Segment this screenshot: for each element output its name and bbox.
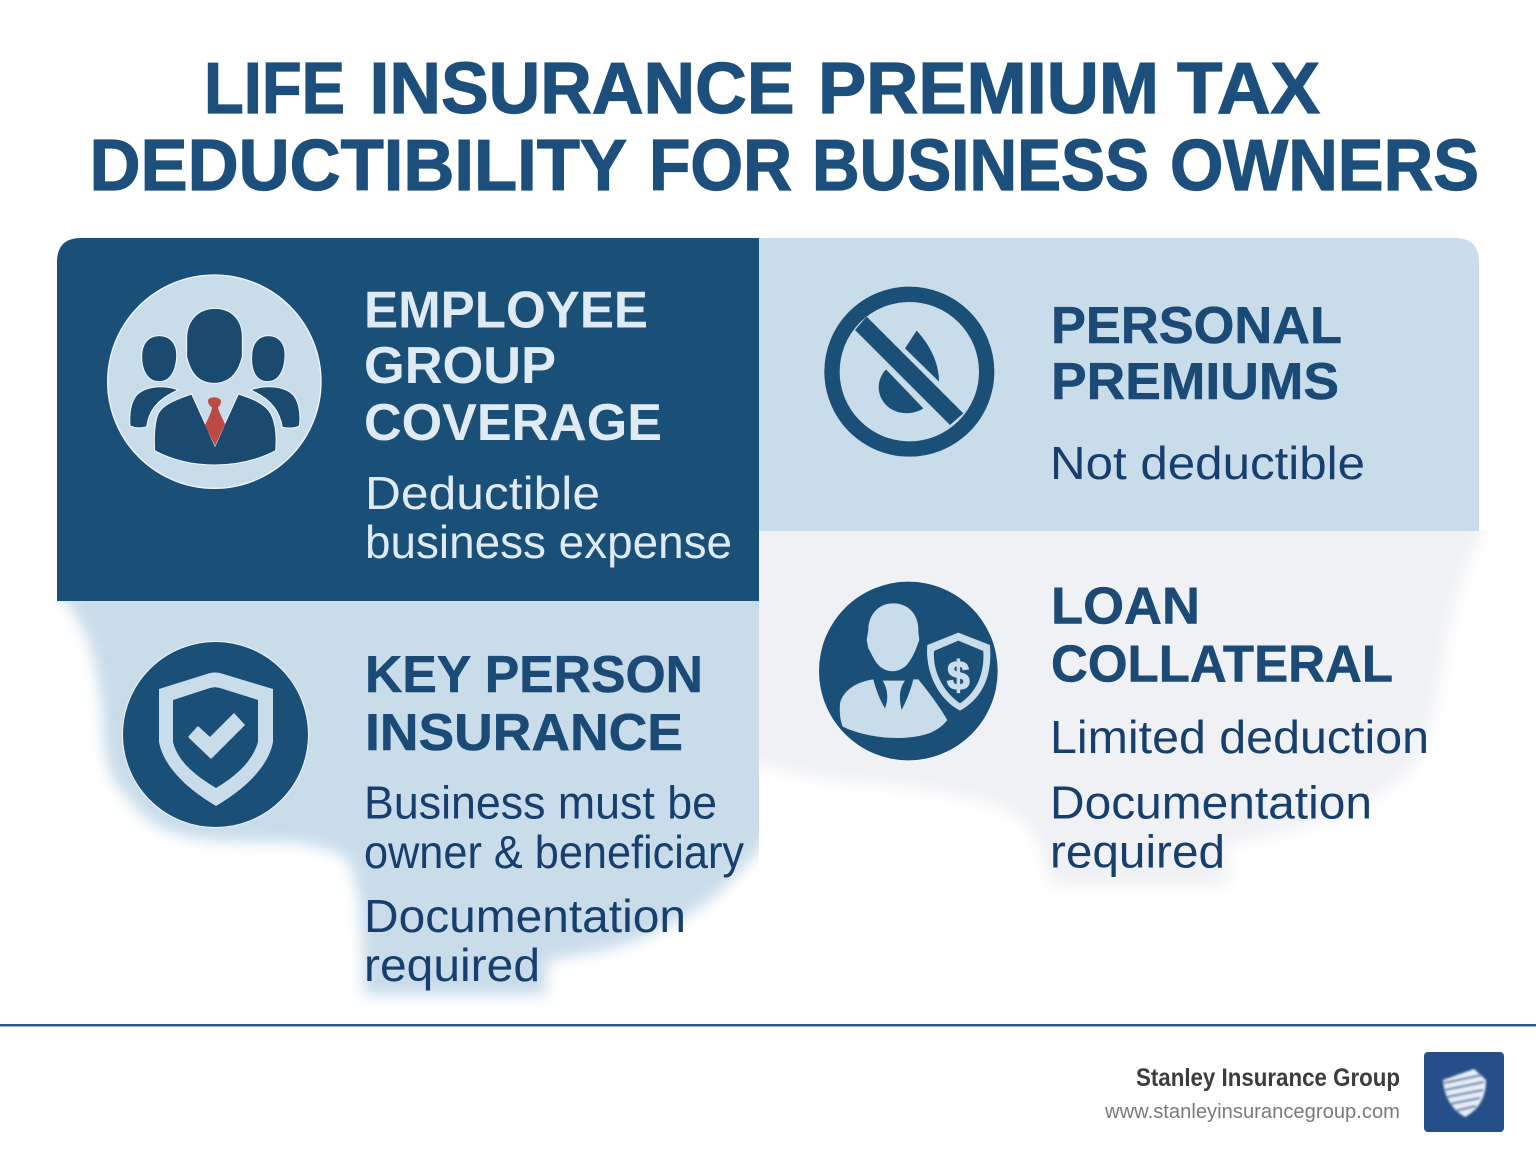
text: business must be owner and beneficiary: owner & beneficiary bbox=[364, 826, 744, 878]
heading: personal premiums bbox=[1051, 297, 1342, 411]
text: deductible business expense: business expense bbox=[365, 516, 732, 568]
heading: key person insurance: KEY PERSON bbox=[365, 646, 703, 704]
heading: employee group coverage: GROUP bbox=[364, 337, 556, 395]
text: documentation required (key person): Documentation bbox=[364, 890, 686, 942]
title bbox=[90, 49, 1479, 206]
icon: employee group bbox=[108, 275, 321, 488]
text: not deductible: Not deductible bbox=[1050, 437, 1365, 489]
icon: person with dollar shield: $ bbox=[947, 652, 970, 698]
icon: shield with checkmark bbox=[122, 642, 308, 828]
heading: personal premiums: PERSONAL bbox=[1051, 297, 1342, 355]
heading: key person insurance bbox=[365, 646, 703, 762]
text: business must be owner and beneficiary bbox=[364, 776, 744, 878]
text: deductible business expense bbox=[365, 467, 732, 568]
panel: key person background bbox=[56, 601, 759, 1002]
icon: person with dollar shield bbox=[819, 582, 998, 760]
heading: employee group coverage: EMPLOYEE bbox=[364, 282, 648, 340]
text: deductible business expense: Deductible bbox=[365, 467, 600, 519]
panel: personal premiums background bbox=[759, 238, 1479, 531]
text: documentation required (key person) bbox=[364, 890, 686, 991]
text: documentation required (key person): required bbox=[364, 939, 540, 991]
panel: loan collateral background bbox=[740, 510, 1490, 885]
heading: loan collateral: COLLATERAL bbox=[1051, 636, 1393, 694]
title: TAX bbox=[1177, 49, 1320, 129]
heading: loan collateral: LOAN bbox=[1051, 578, 1200, 636]
heading: personal premiums: PREMIUMS bbox=[1051, 353, 1339, 411]
panel: employee group coverage background bbox=[57, 238, 759, 601]
heading: employee group coverage: COVERAGE bbox=[364, 394, 662, 452]
title: LIFE bbox=[204, 49, 345, 129]
text: limited deduction: Limited deduction bbox=[1050, 711, 1429, 763]
title: FOR bbox=[649, 126, 792, 206]
text: documentation required (loan): required bbox=[1050, 826, 1225, 878]
icon: prohibited drop bbox=[832, 294, 987, 449]
title: PREMIUM bbox=[818, 49, 1159, 129]
text: documentation required (loan): Documentation bbox=[1050, 776, 1372, 828]
text: documentation required (loan) bbox=[1050, 776, 1372, 878]
title: INSURANCE bbox=[370, 49, 794, 129]
icon: company logo shield bbox=[1424, 1052, 1504, 1132]
title: OWNERS bbox=[1170, 126, 1479, 206]
title: DEDUCTIBILITY bbox=[90, 126, 627, 206]
footer: company name: Stanley Insurance Group bbox=[1136, 1064, 1400, 1092]
footer: website: www.stanleyinsurancegroup.com bbox=[1104, 1101, 1400, 1123]
text: business must be owner and beneficiary: Business must be bbox=[364, 776, 717, 828]
heading: loan collateral bbox=[1051, 578, 1393, 694]
heading: employee group coverage bbox=[364, 282, 662, 452]
heading: key person insurance: INSURANCE bbox=[365, 704, 683, 762]
title: BUSINESS bbox=[812, 126, 1149, 206]
